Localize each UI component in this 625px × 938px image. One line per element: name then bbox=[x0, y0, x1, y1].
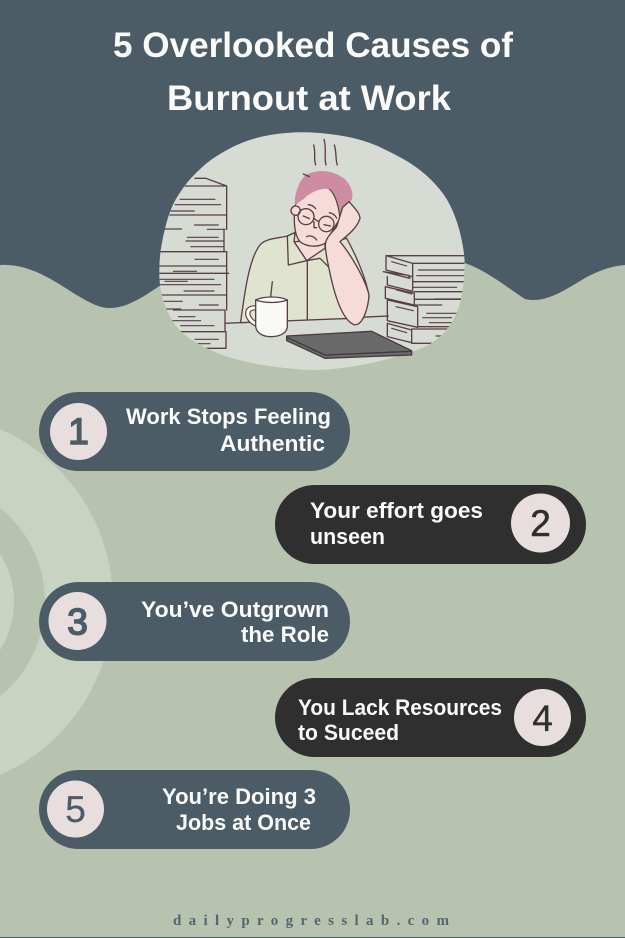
text: cause 2: Your effort goes bbox=[310, 498, 483, 523]
face bbox=[294, 187, 340, 246]
text: cause 3 bbox=[141, 597, 329, 647]
number badge 5 bbox=[47, 780, 104, 838]
pill 2 bbox=[275, 485, 586, 564]
pill 3 bbox=[39, 582, 350, 661]
title: 5 Overlooked Causes of bbox=[113, 26, 513, 65]
hair bbox=[295, 172, 352, 217]
text: cause 3: You’ve Outgrown bbox=[141, 597, 329, 622]
text: cause 5: You’re Doing 3 bbox=[162, 784, 316, 809]
footer website: dailyprogresslab.com bbox=[173, 913, 450, 929]
decorative concentric circles bbox=[0, 413, 113, 791]
text: cause 2: unseen bbox=[310, 524, 385, 549]
text: cause 3: the Role bbox=[241, 622, 329, 647]
glasses bbox=[298, 209, 334, 232]
text: cause 4 bbox=[298, 695, 502, 745]
number badge 3: 3 bbox=[67, 602, 88, 642]
number badge 2: 2 bbox=[530, 503, 551, 544]
text: cause 1 bbox=[126, 404, 331, 456]
number badge 1: 1 bbox=[68, 411, 89, 452]
person bbox=[241, 172, 369, 325]
pill 4 bbox=[275, 678, 586, 757]
forearm and hand bbox=[325, 202, 369, 325]
text: cause 4: to Suceed bbox=[298, 720, 399, 745]
title: Burnout at Work bbox=[167, 79, 452, 118]
illustration: exhausted worker at desk bbox=[159, 132, 465, 370]
text: cause 1: Work Stops Feeling bbox=[126, 404, 331, 429]
text: cause 5 bbox=[162, 784, 316, 835]
shirt bbox=[241, 233, 369, 323]
title bbox=[113, 26, 513, 118]
number badge 2 bbox=[511, 494, 570, 552]
wavy sage background bbox=[0, 250, 625, 938]
neck and collar bbox=[294, 240, 325, 261]
icon: coffee mug bbox=[248, 297, 287, 337]
pill 5 bbox=[39, 770, 350, 849]
number badge 4: 4 bbox=[532, 698, 553, 739]
icon: desk edge bbox=[225, 316, 388, 323]
icon: left paper stack bbox=[159, 178, 229, 348]
pill 1 bbox=[39, 392, 350, 471]
text: cause 1: Authentic bbox=[220, 431, 325, 456]
number badge 3 bbox=[48, 592, 106, 650]
closed eyes, brows, nose and mouth bbox=[303, 205, 337, 240]
number badge 5: 5 bbox=[65, 789, 86, 830]
text: cause 4: You Lack Resources bbox=[298, 695, 502, 720]
shirt placket and fold bbox=[271, 261, 307, 319]
text: cause 5: Jobs at Once bbox=[176, 810, 311, 835]
icon: steam lines bbox=[314, 139, 337, 165]
ear bbox=[291, 206, 300, 215]
header background bbox=[0, 0, 625, 320]
icon: closed laptop bbox=[287, 331, 412, 358]
text: cause 2 bbox=[310, 498, 483, 549]
number badge 4 bbox=[514, 689, 571, 746]
icon: right paper stack bbox=[383, 256, 465, 343]
number badge 1 bbox=[50, 403, 107, 460]
